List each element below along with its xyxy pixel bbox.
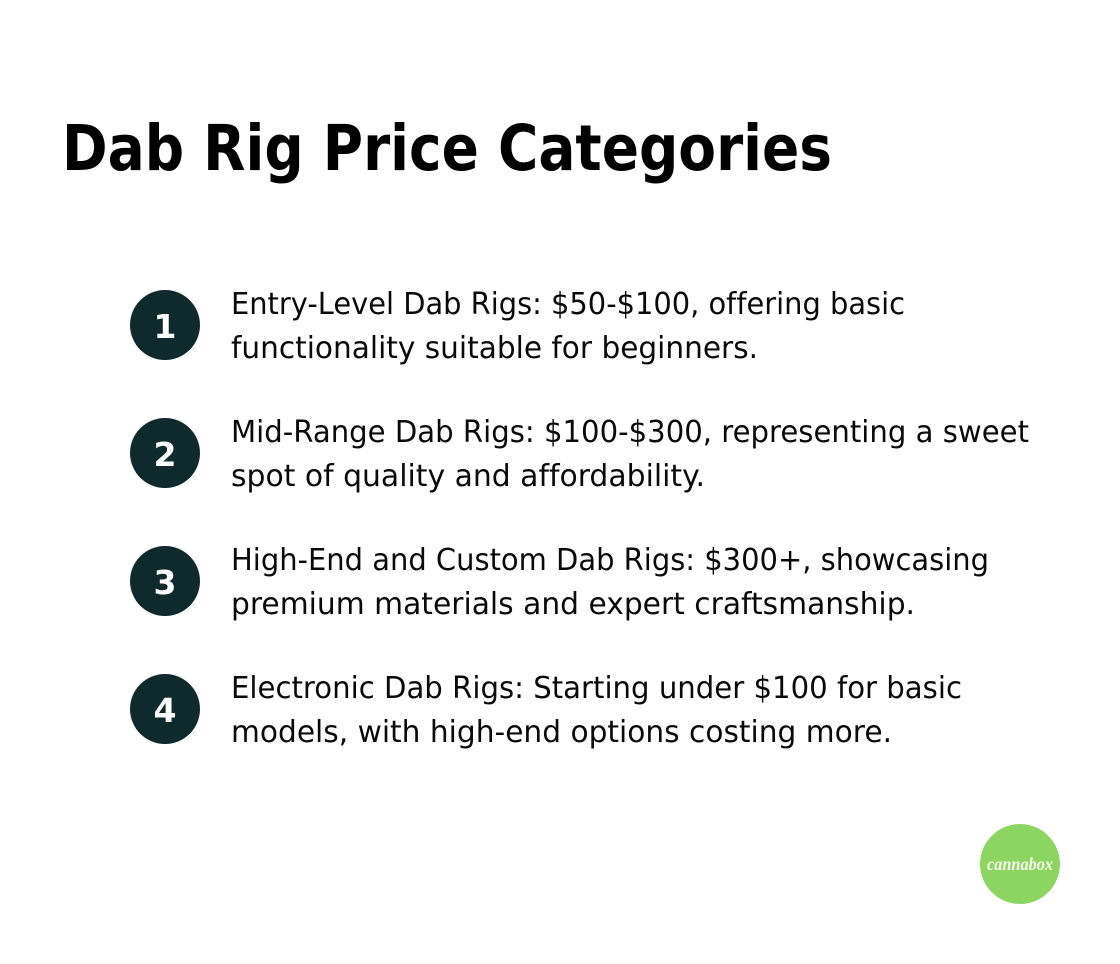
item 2 text: Mid-Range Dab Rigs: $100-$300, representing a sweet bbox=[231, 415, 1029, 450]
list item 1 bbox=[130, 287, 905, 366]
item 1 text: Entry-Level Dab Rigs: $50-$100, offering basic bbox=[231, 287, 905, 322]
item 4 text bbox=[231, 671, 962, 750]
logo: cannabox bbox=[980, 824, 1060, 904]
number badge 4 bbox=[130, 674, 200, 744]
item 4 text: models, with high-end options costing more. bbox=[231, 715, 892, 750]
number badge 3 bbox=[130, 546, 200, 616]
number badge 3: 3 bbox=[154, 563, 176, 602]
title: Dab Rig Price Categories bbox=[62, 112, 832, 185]
item 3 text: premium materials and expert craftsmanship. bbox=[231, 587, 915, 622]
item 1 text: functionality suitable for beginners. bbox=[231, 331, 758, 366]
list item 4 bbox=[130, 671, 962, 750]
item 4 text: Electronic Dab Rigs: Starting under $100 for basic bbox=[231, 671, 962, 706]
item 2 text: spot of quality and affordability. bbox=[231, 459, 705, 494]
number badge 2 bbox=[130, 418, 200, 488]
list item 3 bbox=[130, 543, 989, 622]
item 2 text bbox=[231, 415, 1029, 494]
item 1 text bbox=[231, 287, 905, 366]
list item 2 bbox=[130, 415, 1029, 494]
number badge 4: 4 bbox=[154, 691, 176, 730]
item 3 text: High-End and Custom Dab Rigs: $300+, showcasing bbox=[231, 543, 989, 578]
number badge 1: 1 bbox=[154, 307, 176, 346]
item 3 text bbox=[231, 543, 989, 622]
number badge 1 bbox=[130, 290, 200, 360]
logo: cannabox: cannabox bbox=[987, 854, 1053, 874]
number badge 2: 2 bbox=[154, 435, 176, 474]
